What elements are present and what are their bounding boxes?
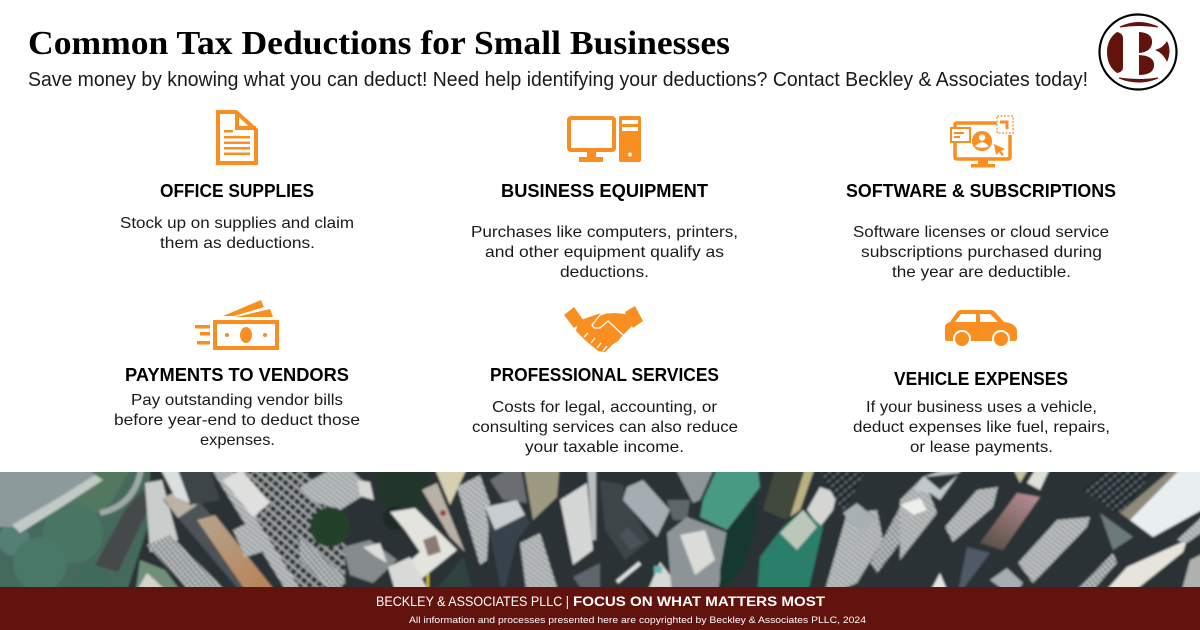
heading: PROFESSIONAL SERVICES [490, 365, 719, 385]
center towers [434, 472, 468, 506]
text block: or lease payments. [910, 439, 1053, 456]
text block: your taxable income. [525, 439, 684, 456]
copyright: All information and processes presented here are copyrighted by Beckley & Associates PLLC, 2024 [409, 615, 866, 626]
subtitle: Save money by knowing what you can deduct! Need help identifying your deductions? Contact Beckley & Associates today! [28, 68, 1088, 91]
icon: banknotes [195, 300, 277, 348]
text block: them as deductions. [160, 235, 315, 252]
text block: subscriptions purchased during [861, 244, 1102, 261]
footer bar [0, 587, 1200, 630]
title: Common Tax Deductions for Small Businesses [28, 25, 730, 62]
text block [472, 399, 738, 456]
heading: OFFICE SUPPLIES [160, 181, 314, 201]
heading: PAYMENTS TO VENDORS [125, 365, 349, 385]
text block [853, 399, 1110, 456]
heading: VEHICLE EXPENSES [894, 369, 1068, 389]
icon: monitor with user and cursor [951, 116, 1013, 168]
right [900, 477, 937, 560]
right of centre [600, 480, 650, 560]
text block: Pay outstanding vendor bills [131, 392, 343, 409]
aerial city photo band [0, 472, 1200, 587]
text block [471, 224, 738, 281]
icon: car [945, 310, 1017, 347]
panel: business equipment [471, 116, 738, 281]
icon: document [218, 112, 256, 163]
text block: Software licenses or cloud service [853, 224, 1109, 241]
panel: professional services [472, 306, 738, 456]
footer tagline: BECKLEY & ASSOCIATES PLLC | [376, 594, 569, 609]
text block [120, 215, 354, 252]
footer tagline: FOCUS ON WHAT MATTERS MOST [573, 594, 826, 609]
text block: Stock up on supplies and claim [120, 215, 354, 232]
panel: payments to vendors [114, 300, 360, 449]
panel: software and subscriptions [846, 116, 1116, 281]
icon: handshake [564, 306, 643, 352]
icon: desktop computer [569, 116, 641, 162]
text block: and other equipment qualify as [485, 244, 724, 261]
center-left [299, 472, 363, 512]
heading: SOFTWARE & SUBSCRIPTIONS [846, 181, 1116, 201]
panel: office supplies [120, 112, 354, 252]
logo [1100, 14, 1176, 90]
text block: deduct expenses like fuel, repairs, [853, 419, 1110, 436]
text block: Purchases like computers, printers, [471, 224, 738, 241]
text block: before year-end to deduct those [114, 412, 360, 429]
heading: BUSINESS EQUIPMENT [501, 181, 708, 201]
park and roofs [0, 472, 152, 587]
text block [114, 392, 360, 449]
text block [853, 224, 1109, 281]
text block: If your business uses a vehicle, [866, 399, 1097, 416]
text block: expenses. [200, 432, 275, 449]
tan tower block [145, 480, 178, 552]
panel: vehicle expenses [853, 310, 1110, 456]
text block: consulting services can also reduce [472, 419, 738, 436]
text block: Costs for legal, accounting, or [492, 399, 718, 416]
text block: deductions. [560, 264, 649, 281]
text block: the year are deductible. [892, 264, 1071, 281]
